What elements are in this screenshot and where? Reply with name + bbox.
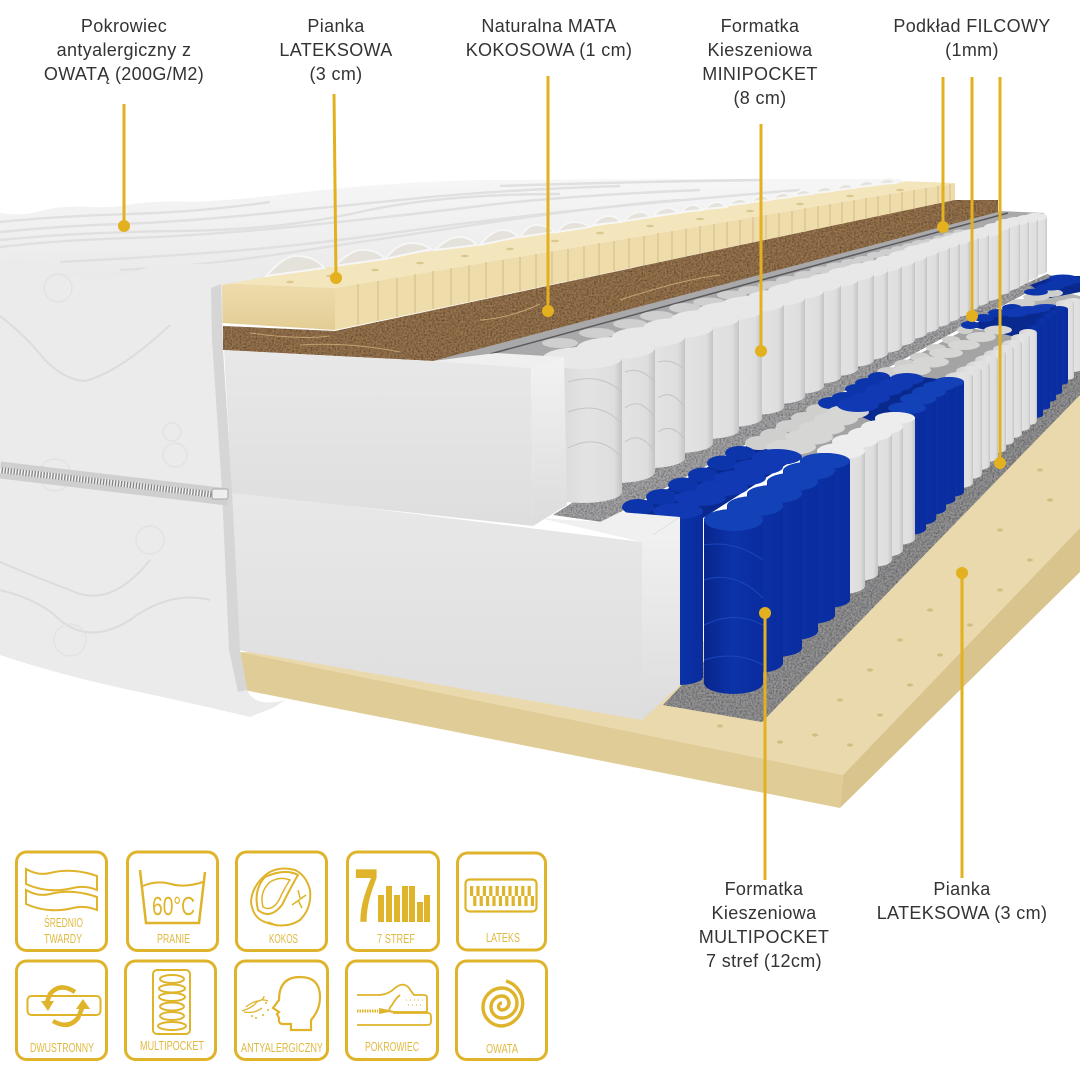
minipocket caps row behind <box>542 230 967 348</box>
label: cover: Pokrowiec <box>81 16 167 36</box>
label: felt: (1mm) <box>945 40 999 60</box>
label: felt: Podkład FILCOWY <box>893 16 1051 36</box>
coconut mat layer <box>223 200 998 361</box>
icon: cover: POKROWIEC <box>365 1040 419 1054</box>
label: minipocket: Kieszeniowa <box>708 40 813 60</box>
label: multipocket: Kieszeniowa <box>712 903 817 923</box>
mattress cover front flap <box>0 259 285 717</box>
icon: latex <box>458 853 546 950</box>
label: upper latex: LATEKSOWA <box>279 40 393 60</box>
icon: two-sided: DWUSTRONNY <box>30 1041 94 1055</box>
label: multipocket: 7 stref (12cm) <box>706 951 822 971</box>
lower white foam side block <box>230 491 680 720</box>
minipocket white spring pockets (upper layer) <box>543 213 1047 503</box>
icon: coconut <box>236 852 326 950</box>
bottom latex foam layer <box>240 395 1080 808</box>
middle felt pad <box>553 274 1056 522</box>
pointer: felt 3 <box>994 77 1006 469</box>
icon: 7 zones <box>348 852 438 950</box>
upper white foam side block <box>224 350 567 526</box>
icon: latex: LATEKS <box>486 931 520 945</box>
multipocket caps rows (lower layer, back rows) <box>622 274 1080 685</box>
label: coconut mat: Naturalna MATA <box>481 16 617 36</box>
icon: anti-allergic <box>236 961 328 1060</box>
lower felt pad <box>663 330 1080 722</box>
icon: cover <box>346 961 438 1060</box>
icon: washing 60C <box>128 852 218 950</box>
pointer: cover <box>118 104 130 232</box>
icon: medium firm: TWARDY <box>44 932 82 946</box>
label: upper latex: (3 cm) <box>309 64 363 84</box>
label: cover: OWATĄ (200G/M2) <box>44 64 204 84</box>
label: minipocket: (8 cm) <box>733 88 787 108</box>
zipper <box>0 470 228 499</box>
icon: anti-allergic: ANTYALERGICZNY <box>241 1041 323 1055</box>
label: lower latex: Pianka <box>933 879 991 899</box>
pointer: multipocket <box>759 607 771 880</box>
icon: medium firm: ŚREDNIO <box>44 915 83 930</box>
label: lower latex: LATEKSOWA (3 cm) <box>877 903 1047 923</box>
label: minipocket: MINIPOCKET <box>702 64 818 84</box>
icon: 7 zones: 7 STREF <box>377 932 415 946</box>
pointer: coconut mat <box>542 76 554 317</box>
icon: wadding spiral <box>456 961 546 1060</box>
multipocket underlay bands between pocket caps <box>625 276 1080 520</box>
icon: washing 60C: 60°C <box>152 891 195 921</box>
label: multipocket: Formatka <box>725 879 804 899</box>
pointer: felt 2 <box>966 77 978 322</box>
label: cover: antyalergiczny z <box>57 40 191 60</box>
icon: multipocket spring <box>126 961 216 1060</box>
icon: 7 zones: 7 <box>354 855 379 939</box>
icon: medium firm <box>16 852 106 950</box>
label: upper latex: Pianka <box>307 16 365 36</box>
cover scalloped cut edge <box>266 179 896 276</box>
quilted cover top surface <box>0 179 905 285</box>
icon: two-sided <box>16 961 106 1060</box>
multipocket front row: white and blue spring pockets <box>704 298 1080 694</box>
label: coconut mat: KOKOSOWA (1 cm) <box>466 40 632 60</box>
pointer: lower latex <box>956 567 968 878</box>
icon: wadding spiral: OWATA <box>486 1042 518 1056</box>
pointer: minipocket <box>755 124 767 357</box>
upper felt pad with seam <box>433 211 1045 361</box>
pointer: felt 1 <box>937 77 949 233</box>
label: minipocket: Formatka <box>721 16 800 36</box>
icon: washing 60C: PRANIE <box>157 932 190 946</box>
icon: multipocket spring: MULTIPOCKET <box>140 1039 204 1053</box>
label: multipocket: MULTIPOCKET <box>699 927 829 947</box>
latex foam upper layer <box>221 181 955 330</box>
icon: coconut: KOKOS <box>269 932 298 946</box>
pointer: upper latex <box>330 94 342 284</box>
